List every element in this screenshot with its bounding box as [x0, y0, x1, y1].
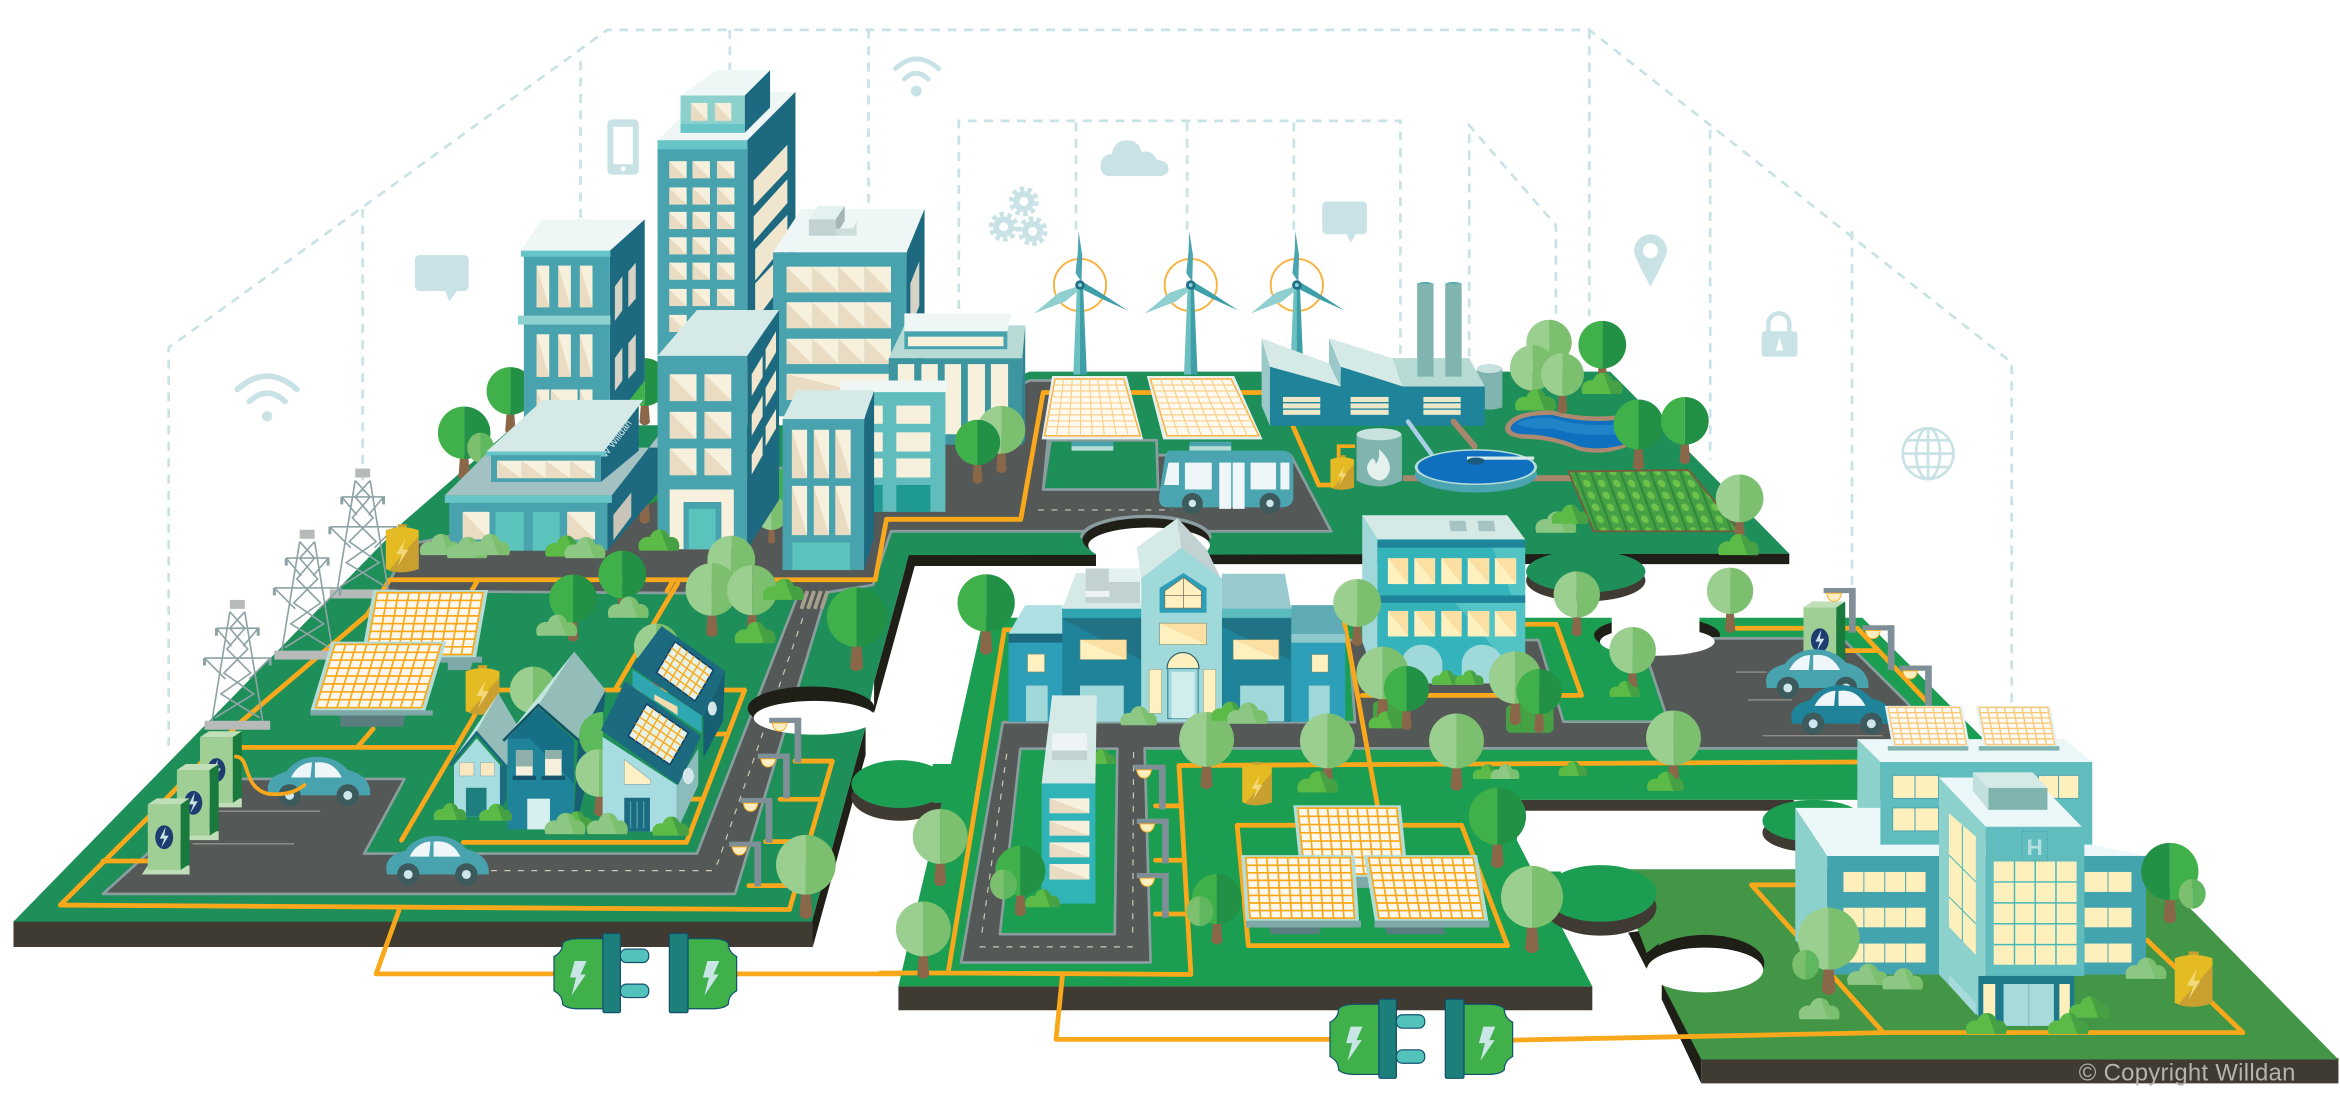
platform: middle ground — [898, 604, 2044, 1010]
green plaza inside upper road — [1043, 440, 1158, 489]
roads: middle platform — [961, 628, 1940, 963]
building: front central tower — [658, 310, 779, 549]
jigsaw hole: hospital — [1628, 931, 1764, 992]
wind farm: turbines — [1034, 231, 1344, 375]
parked cars: right — [1766, 649, 1894, 735]
street lamps: middle — [1134, 765, 1169, 918]
transmission towers — [204, 469, 396, 730]
water treatment basin — [1403, 422, 1571, 492]
signage: W Willdan — [600, 418, 635, 460]
back block — [1857, 739, 2092, 846]
building: tall central tower — [658, 70, 795, 379]
tab: right to hospital — [1531, 865, 1656, 936]
building: front right tower — [783, 390, 874, 570]
icon: battery upper left — [386, 524, 419, 572]
icon: battery at tank — [1330, 446, 1355, 490]
power lines: upper and left — [60, 392, 1331, 974]
hospital H sign — [2022, 831, 2047, 861]
icon: wifi large — [237, 376, 297, 420]
front tower — [1939, 772, 2084, 1026]
tab: upper platform jigsaw — [1526, 551, 1645, 601]
icon: gears — [991, 189, 1045, 244]
charging station: right — [1798, 601, 1845, 677]
dashed network outline — [169, 30, 2012, 746]
school building — [1009, 518, 1345, 722]
office building: middle right — [1362, 515, 1525, 683]
roads: upper and left — [103, 381, 1331, 894]
narrow front building — [1042, 695, 1097, 904]
charging stations: left — [142, 731, 242, 874]
icon: chat bubble right — [1322, 201, 1367, 243]
far-right wing — [1291, 605, 1345, 722]
hospital H sign: H — [2027, 835, 2043, 860]
solar panels: middle array — [1241, 805, 1489, 934]
trees: behind mid city — [755, 406, 1025, 544]
building: low front-left office — [445, 400, 658, 551]
roof solar panels — [1885, 706, 2059, 751]
building: far right low office — [889, 313, 1025, 445]
factory — [1262, 282, 1502, 426]
right wing — [1222, 574, 1291, 722]
shrubs: city base — [420, 529, 679, 558]
car charging left — [236, 757, 370, 807]
house: solar roof — [601, 626, 725, 832]
house: small light — [450, 693, 517, 817]
jigsaw hole: upper platform — [1082, 517, 1210, 567]
street lamps: left — [729, 718, 801, 886]
icon: battery hospital — [2175, 951, 2213, 1007]
shrub behind narrow building — [1087, 749, 1116, 764]
trees: middle platform — [896, 568, 1753, 979]
icon: cloud — [1101, 140, 1169, 176]
pond — [1505, 410, 1633, 453]
jigsaw hole: middle — [1594, 604, 1720, 656]
building: left tower — [518, 219, 645, 433]
shrubs: house fronts — [434, 803, 689, 836]
far-left wing — [1009, 605, 1063, 722]
platform: hospital ground — [1625, 869, 2338, 1083]
left wing — [1062, 569, 1141, 722]
gas storage tank — [1357, 428, 1402, 486]
icon: padlock — [1762, 313, 1798, 357]
icon: globe — [1903, 428, 1953, 479]
houses — [434, 623, 725, 836]
tree: school left — [958, 574, 1015, 655]
shrubs: hospital — [1799, 958, 2166, 1034]
plugs: left pair — [554, 934, 737, 1013]
shrubs: middle platform — [1025, 670, 1684, 907]
car on street — [386, 836, 489, 886]
main wing — [1795, 808, 2146, 974]
icon: battery by houses — [466, 665, 499, 715]
trees and shrubs: upper right — [1510, 320, 1763, 555]
building: back right office — [773, 206, 925, 416]
house: dark teal — [503, 652, 606, 829]
trees: left platform front — [536, 536, 886, 671]
trees: hospital — [1792, 843, 2206, 995]
platform: main upper and left ground — [13, 372, 1789, 947]
hospital — [1795, 706, 2146, 1026]
building: adjacent teal block — [840, 381, 948, 512]
bus — [1159, 451, 1293, 514]
icon: location pin — [1634, 234, 1667, 287]
icon: wifi small — [895, 59, 939, 94]
centre gable — [1137, 518, 1222, 722]
jigsaw hole: left platform — [748, 686, 876, 735]
icon: chat bubble left — [415, 255, 469, 301]
street lamps: right — [1824, 588, 1932, 710]
tab: left jigsaw — [851, 760, 958, 821]
power lines: middle and hospital — [880, 622, 2243, 1040]
solar panels: left array — [310, 590, 488, 727]
solar panels: upper field — [1042, 376, 1263, 451]
icon: smartphone — [607, 119, 639, 175]
crop field — [1568, 470, 1740, 531]
tree: left street corner — [776, 835, 836, 919]
trees: left platform back — [438, 358, 669, 524]
plugs: right pair — [1330, 999, 1513, 1078]
tab: hidden behind hospital — [1762, 800, 1864, 852]
copyright: © Copyright Willdan — [2079, 1059, 2296, 1086]
icon: battery middle — [1242, 762, 1272, 805]
